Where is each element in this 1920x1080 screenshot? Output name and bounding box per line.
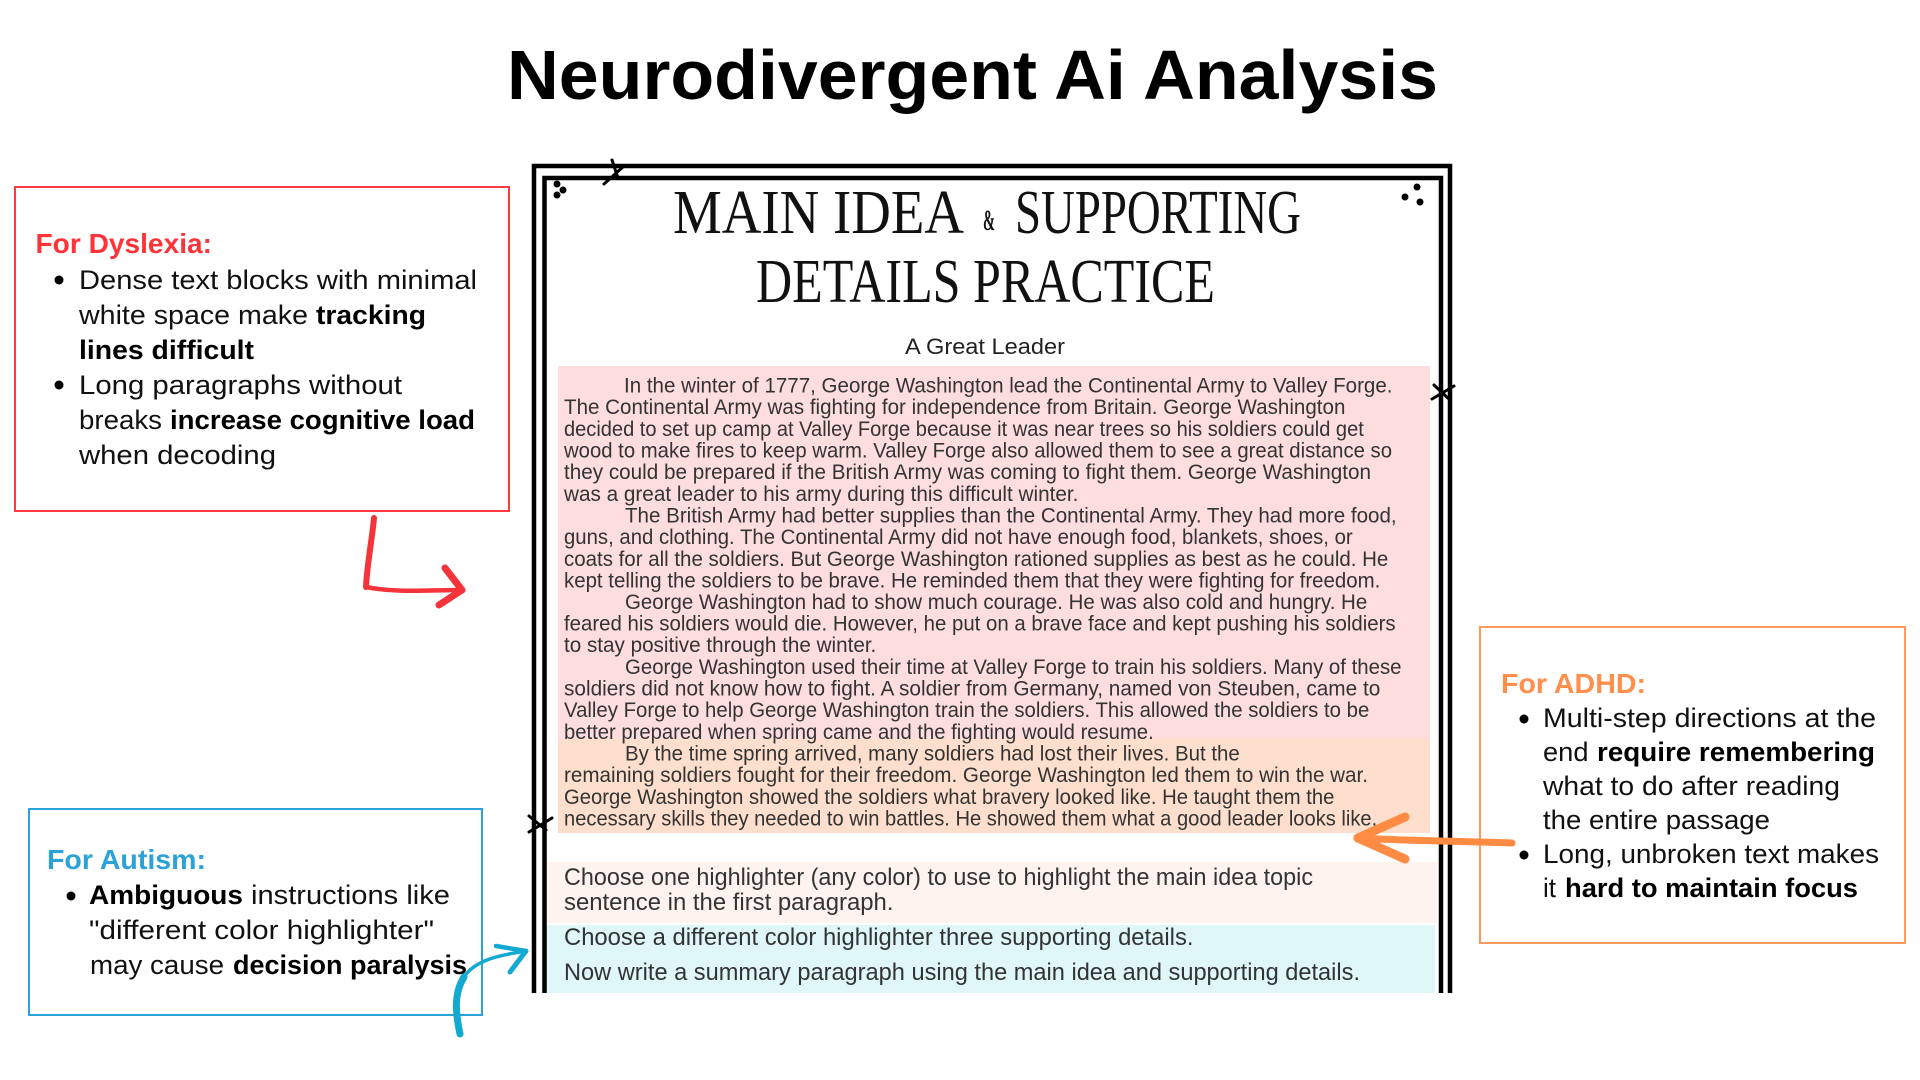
- ADHD bullet list: [1520, 703, 1879, 903]
- ADHD bullet list: Multi-step directions at the: [1543, 703, 1876, 733]
- dyslexia bullet list: tracking: [316, 300, 426, 330]
- worksheet reading passage: necessary skills they needed to win battles. He showed them what a good leader looks like.: [564, 808, 1377, 830]
- panel: dyslexia callout: [15, 187, 509, 511]
- worksheet highlight: orange final paragraph background: [558, 739, 1430, 833]
- worksheet reading passage: [563, 374, 1402, 830]
- worksheet reading passage: wood to make fires to keep warm. Valley Forge also allowed them to see a great distance so: [563, 440, 1392, 462]
- worksheet reading passage: George Washington showed the soldiers what bravery looked like. He taught them the: [564, 786, 1334, 809]
- arrow: dyslexia to passage: [366, 518, 462, 605]
- dyslexia heading: For Dyslexia:: [36, 228, 212, 259]
- panel: ADHD callout: [1480, 627, 1905, 943]
- worksheet instructions: Choose one highlighter (any color) to use to highlight the main idea topic: [564, 864, 1313, 891]
- ADHD bullet list: the entire passage: [1543, 805, 1770, 835]
- worksheet heading: MAIN IDEA: [673, 179, 964, 247]
- autism bullet list: "different color highlighter": [89, 915, 434, 945]
- worksheet subtitle: A Great Leader: [905, 334, 1065, 359]
- autism bullet list: Ambiguous: [89, 880, 243, 910]
- worksheet reading passage: The Continental Army was fighting for independence from Britain. George Washington: [564, 396, 1345, 419]
- ADHD bullet list: hard to maintain focus: [1565, 873, 1858, 903]
- worksheet reading passage: remaining soldiers fought for their freedom. George Washington led them to win the war.: [564, 764, 1368, 787]
- worksheet heading: &: [983, 204, 995, 237]
- ADHD bullet list: it: [1543, 873, 1557, 903]
- dyslexia bullet list: breaks: [79, 405, 162, 435]
- ADHD bullet list: require remembering: [1597, 737, 1875, 767]
- dyslexia bullet list: when decoding: [78, 440, 276, 470]
- worksheet reading passage: was a great leader to his army during this difficult winter.: [563, 483, 1078, 506]
- ADHD bullet list: end: [1543, 737, 1588, 767]
- worksheet reading passage: guns, and clothing. The Continental Army did not have enough food, blankets, shoes, or: [564, 526, 1353, 549]
- title: Neurodivergent Ai Analysis: [507, 36, 1438, 114]
- ADHD bullet list: Long, unbroken text makes: [1543, 839, 1879, 869]
- worksheet double border: [534, 166, 1450, 993]
- autism bullet list: instructions like: [251, 880, 450, 910]
- worksheet heading: SUPPORTING: [1015, 179, 1301, 247]
- panel: autism callout: [29, 809, 482, 1015]
- worksheet heading: [673, 179, 1301, 316]
- worksheet instructions: [564, 864, 1360, 986]
- worksheet reading passage: decided to set up camp at Valley Forge because it was near trees so his soldiers could get: [564, 418, 1364, 441]
- autism bullet list: [66, 880, 467, 980]
- worksheet reading passage: By the time spring arrived, many soldiers had lost their lives. But the: [625, 742, 1240, 766]
- worksheet reading passage: they could be prepared if the British Army was coming to fight them. George Washington: [564, 461, 1371, 484]
- worksheet heading: DETAILS PRACTICE: [756, 248, 1215, 316]
- dyslexia bullet list: lines difficult: [79, 335, 254, 365]
- worksheet highlight: blue instruction background: [545, 925, 1435, 993]
- worksheet reading passage: Valley Forge to help George Washington train the soldiers. This allowed the soldiers to be: [564, 699, 1369, 722]
- worksheet reading passage: soldiers did not know how to fight. A soldier from Germany, named von Steuben, came to: [564, 678, 1380, 700]
- worksheet reading passage: to stay positive through the winter.: [564, 634, 876, 657]
- ADHD heading: For ADHD:: [1501, 668, 1646, 699]
- worksheet highlight: cream instruction background: [545, 862, 1437, 923]
- worksheet highlight: pink passage background: [558, 366, 1430, 739]
- dyslexia bullet list: white space make: [78, 300, 308, 330]
- dyslexia bullet list: [54, 265, 477, 470]
- worksheet reading passage: George Washington had to show much courage. He was also cold and hungry. He: [625, 591, 1367, 614]
- worksheet reading passage: coats for all the soldiers. But George Washington rationed supplies as best as he could. He: [564, 548, 1388, 571]
- worksheet instructions: Choose a different color highlighter three supporting details.: [564, 924, 1194, 951]
- worksheet instructions: Now write a summary paragraph using the main idea and supporting details.: [564, 959, 1360, 986]
- worksheet reading passage: feared his soldiers would die. However, he put on a brave face and kept pushing his soldiers: [564, 612, 1396, 636]
- worksheet panel: [529, 160, 1454, 993]
- worksheet instructions: sentence in the first paragraph.: [564, 889, 894, 916]
- border stitches and corner dots: [529, 160, 1454, 832]
- worksheet reading passage: In the winter of 1777, George Washington lead the Continental Army to Valley Forge.: [624, 374, 1392, 398]
- arrow: autism to instruction: [456, 946, 526, 1034]
- worksheet reading passage: The British Army had better supplies than the Continental Army. They had more food,: [625, 504, 1397, 528]
- autism bullet list: decision paralysis: [233, 950, 467, 980]
- autism bullet list: may cause: [90, 950, 224, 980]
- worksheet reading passage: better prepared when spring came and the fighting would resume.: [564, 721, 1154, 744]
- ADHD bullet list: what to do after reading: [1542, 771, 1840, 801]
- worksheet reading passage: George Washington used their time at Valley Forge to train his soldiers. Many of these: [625, 656, 1402, 679]
- arrow: ADHD to final paragraph: [1358, 817, 1512, 859]
- worksheet reading passage: kept telling the soldiers to be brave. He reminded them that they were fighting for freedom.: [564, 570, 1380, 592]
- dyslexia bullet list: increase cognitive load: [170, 405, 475, 435]
- autism heading: For Autism:: [47, 844, 206, 875]
- dyslexia bullet list: Dense text blocks with minimal: [79, 265, 477, 295]
- dyslexia bullet list: Long paragraphs without: [79, 370, 403, 400]
